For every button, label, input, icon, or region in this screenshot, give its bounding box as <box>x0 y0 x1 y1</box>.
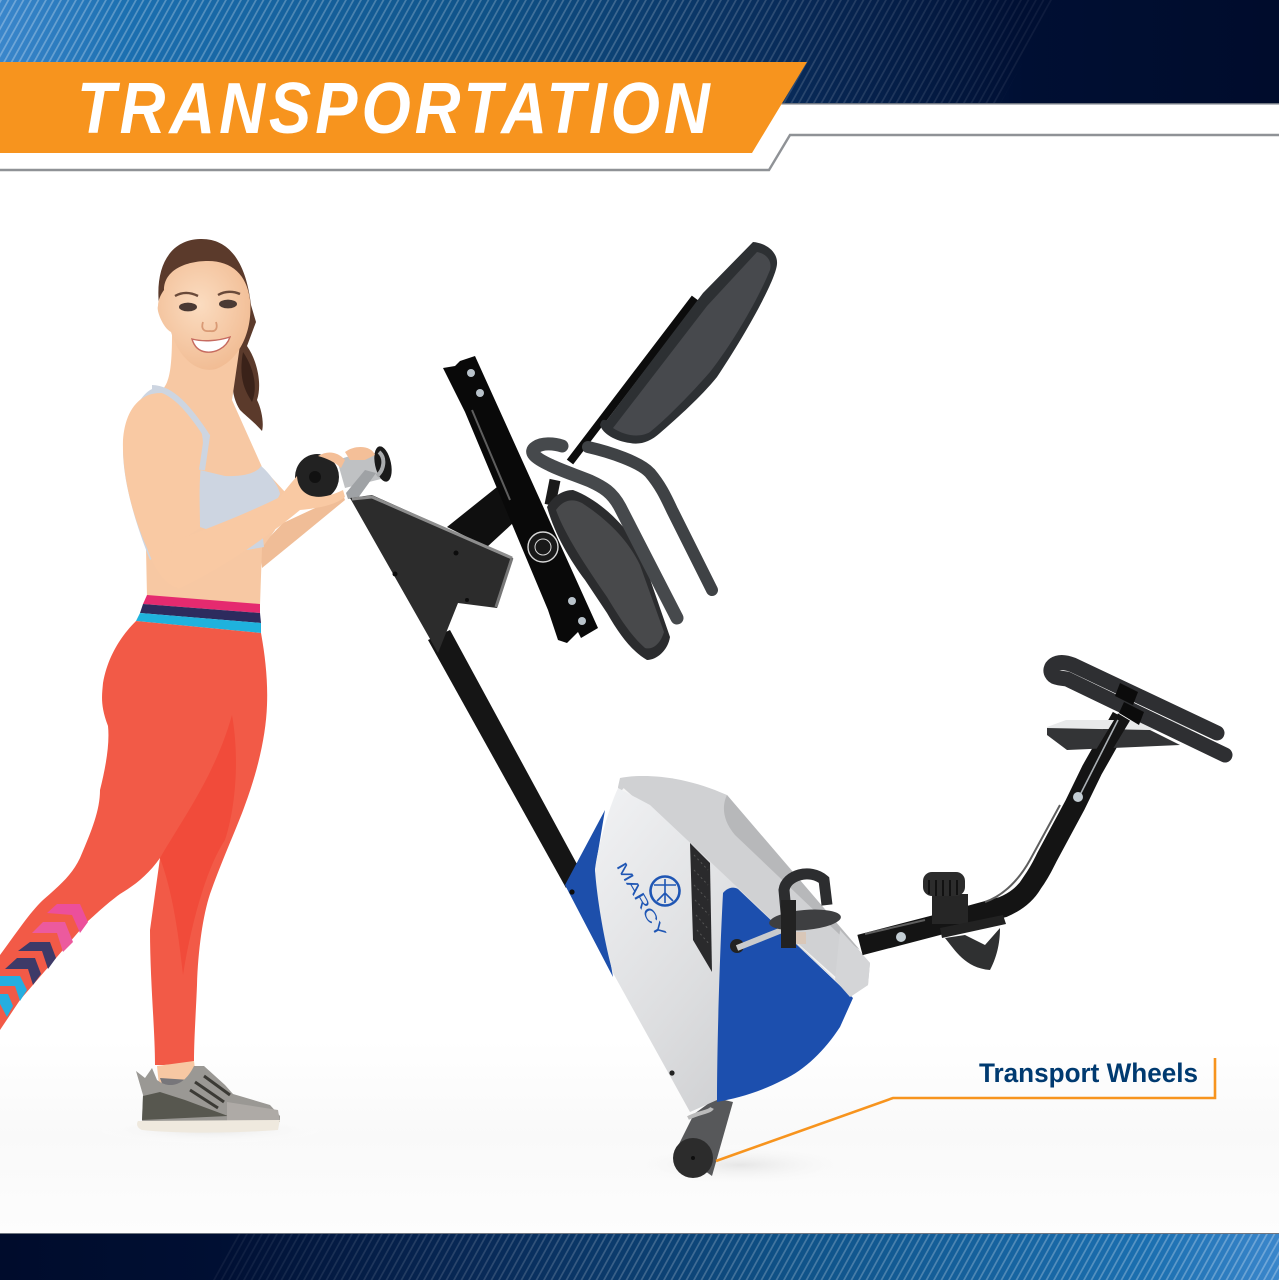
round sticker <box>528 532 558 562</box>
title banner <box>0 62 807 153</box>
pedal crank <box>730 930 782 953</box>
footer striped band <box>0 1233 1279 1280</box>
seat rail with bolts <box>443 356 598 643</box>
console bracket bolts <box>1073 720 1118 802</box>
neck and chest <box>146 335 285 605</box>
rear handle bar near side <box>533 444 677 618</box>
header striped band <box>0 0 1279 104</box>
callout: transport wheels <box>716 1058 1215 1161</box>
front stabilizer pedal bracket <box>940 915 1006 970</box>
triangular mount plate <box>350 495 513 653</box>
pedal and strap <box>768 874 842 948</box>
rear handle bar far side <box>588 447 712 590</box>
marcy logo <box>613 860 680 941</box>
upper arm <box>123 393 203 588</box>
front silver edge <box>835 930 870 997</box>
left blue panel <box>565 810 613 977</box>
wheel cap <box>673 1138 713 1178</box>
waistband <box>136 595 261 633</box>
main bike post <box>428 630 578 888</box>
leader line <box>716 1058 1215 1161</box>
face <box>158 261 250 370</box>
ponytail and hair <box>158 239 263 431</box>
grey sports bra <box>123 388 280 560</box>
callout label: Transport Wheels <box>979 1058 1198 1088</box>
marcy wordmark: MARCY <box>613 860 669 941</box>
side silver panel <box>595 788 855 1112</box>
chevrons on leggings <box>0 904 88 1017</box>
red leggings <box>0 621 267 1065</box>
console <box>1047 720 1193 750</box>
cross tube <box>447 487 513 547</box>
speaker vent <box>690 843 712 972</box>
woman pushing the bike <box>0 239 395 1133</box>
silver handle with black grip end <box>295 445 395 500</box>
top silver shell <box>618 776 870 997</box>
front stem tube <box>860 717 1122 945</box>
far arm <box>260 495 345 568</box>
backrest pad <box>600 242 777 444</box>
screw holes <box>669 1070 675 1076</box>
handlebars <box>1051 663 1225 755</box>
transport wheel tube <box>673 1098 733 1178</box>
bra strap <box>152 388 207 470</box>
forearm and hand <box>171 476 345 589</box>
seat pad <box>547 490 670 660</box>
adjustment knob <box>923 872 968 924</box>
header outline rule <box>0 135 1279 170</box>
floor shadow <box>0 1040 1279 1233</box>
right blue panel <box>717 888 853 1102</box>
fingers <box>318 447 375 468</box>
title text: TRANSPORTATION <box>77 69 712 149</box>
sneaker <box>136 1061 280 1133</box>
upper stem over console <box>1095 717 1124 765</box>
backrest support rail <box>550 298 695 505</box>
bike <box>350 242 1225 1178</box>
